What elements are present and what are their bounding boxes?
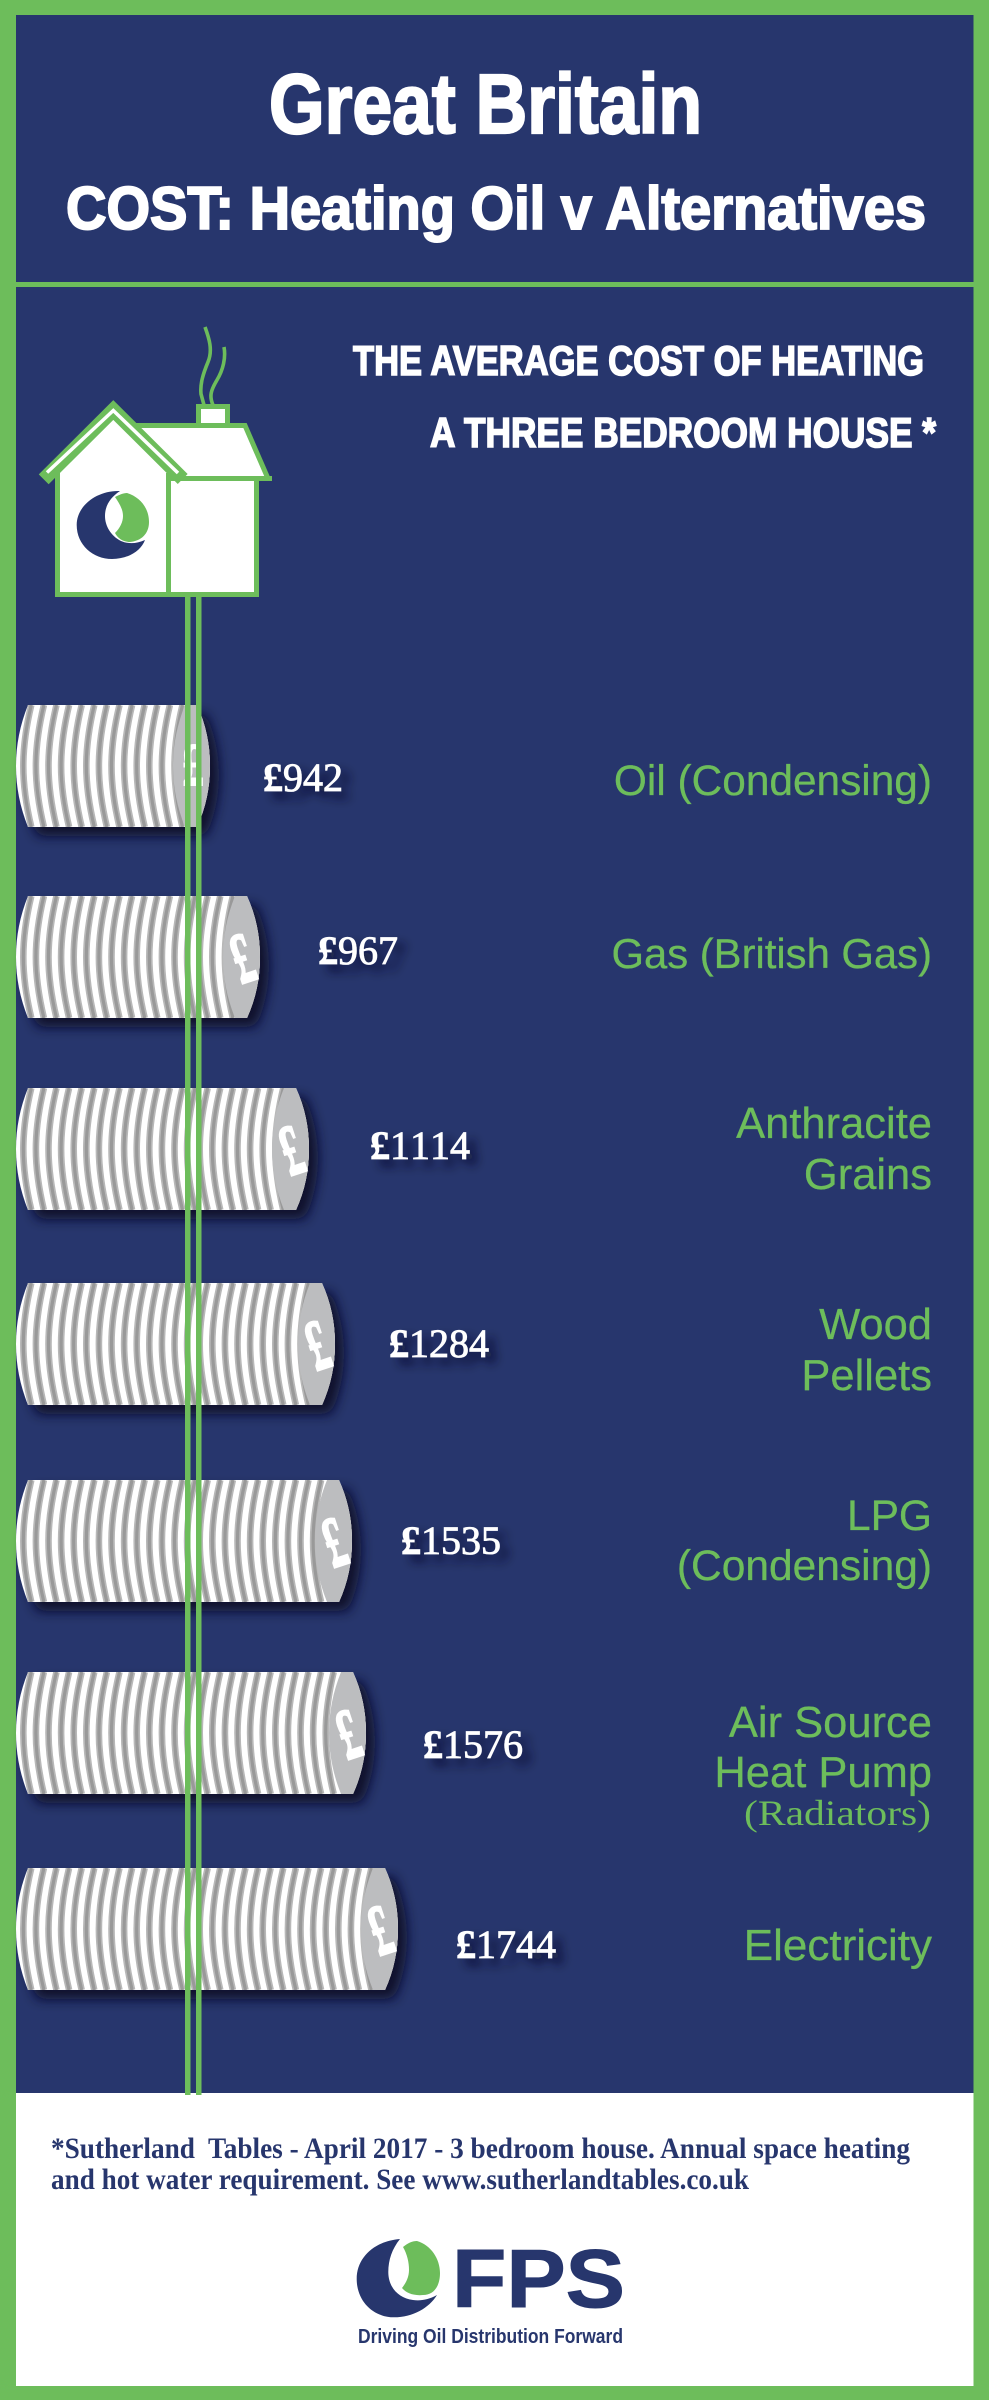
label: LPG: LPG bbox=[847, 1493, 932, 1540]
title block bbox=[66, 57, 926, 242]
value: LPG: £1535 bbox=[401, 1518, 501, 1563]
subtitle: cost comparison: COST: Heating Oil v Alternatives bbox=[66, 175, 926, 242]
pipe end over footer edge bbox=[185, 2090, 202, 2095]
coin stack: anthracite: £ bbox=[270, 1108, 313, 1191]
coin stack: oil bbox=[16, 705, 384, 827]
value: electricity: £1744 bbox=[456, 1922, 556, 1967]
fuel labels bbox=[612, 757, 932, 1970]
smoke bbox=[201, 327, 225, 405]
label: air source heat pump bbox=[714, 1699, 932, 1833]
label: LPG bbox=[677, 1493, 932, 1590]
label: gas: Gas (British Gas) bbox=[612, 930, 932, 977]
logo mark bbox=[357, 2239, 440, 2317]
label: wood pellets: Wood bbox=[819, 1301, 932, 1349]
value: oil: £942 bbox=[263, 755, 343, 800]
chart: coin stacks bbox=[16, 705, 402, 1990]
heading: average cost of heating bbox=[353, 337, 937, 456]
coin stack: anthracite bbox=[16, 1088, 384, 1210]
coin stack: air source heat pump: £ bbox=[327, 1692, 370, 1775]
logo tagline: Driving Oil Distribution Forward bbox=[358, 2326, 623, 2348]
value: gas: £967 bbox=[318, 928, 398, 973]
pipe from house through coins bbox=[185, 595, 202, 2096]
icon: house with FPS logo and smoke bbox=[44, 327, 272, 594]
coin stack: electricity bbox=[16, 1868, 402, 1990]
coin stack: wood pellets: £ bbox=[296, 1303, 339, 1386]
coin stack: air source heat pump bbox=[16, 1672, 384, 1794]
logo: FPS bbox=[357, 2232, 625, 2348]
footnote bbox=[51, 2132, 910, 2196]
value: anthracite: £1114 bbox=[370, 1123, 470, 1168]
house logo drop bbox=[77, 491, 149, 559]
footnote: and hot water requirement. See www.sutherlandtables.co.uk bbox=[51, 2163, 749, 2196]
value: air source heat pump: £1576 bbox=[423, 1722, 523, 1767]
label: air source heat pump: (Radiators) bbox=[744, 1793, 931, 1833]
gable roof bbox=[44, 410, 183, 479]
label: oil: Oil (Condensing) bbox=[614, 757, 932, 804]
label: anthracite: Anthracite bbox=[736, 1100, 932, 1148]
label: air source heat pump: Air Source bbox=[729, 1699, 932, 1747]
price values bbox=[263, 755, 556, 1967]
divider under title bbox=[16, 282, 974, 287]
coin stack: LPG: £ bbox=[313, 1500, 356, 1583]
coin stack: gas bbox=[16, 896, 384, 1018]
footnote: *Sutherland Tables - April 2017 - 3 bedroom house. Annual space heating bbox=[51, 2132, 910, 2165]
label: electricity: Electricity bbox=[744, 1921, 932, 1970]
label: anthracite: Grains bbox=[804, 1151, 932, 1199]
coin stack: wood pellets bbox=[16, 1283, 384, 1405]
coin stack: electricity: £ bbox=[359, 1888, 402, 1971]
label: anthracite bbox=[736, 1100, 932, 1199]
panel: footer bbox=[16, 2093, 974, 2386]
coin stack: LPG bbox=[16, 1480, 384, 1602]
coin stack: oil: £ bbox=[183, 733, 203, 799]
chimney bbox=[198, 406, 228, 426]
label: LPG: (Condensing) bbox=[677, 1543, 932, 1590]
coin stack: gas: £ bbox=[221, 916, 264, 999]
house wall outlines bbox=[58, 473, 272, 594]
label: air source heat pump: Heat Pump bbox=[714, 1749, 932, 1797]
right roof bbox=[135, 426, 268, 478]
logo wordmark: FPS bbox=[452, 2232, 625, 2325]
label: wood pellets: Pellets bbox=[801, 1352, 932, 1400]
title: Great Britain: Great Britain bbox=[269, 57, 702, 151]
label: wood pellets bbox=[801, 1301, 932, 1400]
value: wood pellets: £1284 bbox=[389, 1321, 489, 1366]
house walls fill bbox=[58, 417, 256, 594]
